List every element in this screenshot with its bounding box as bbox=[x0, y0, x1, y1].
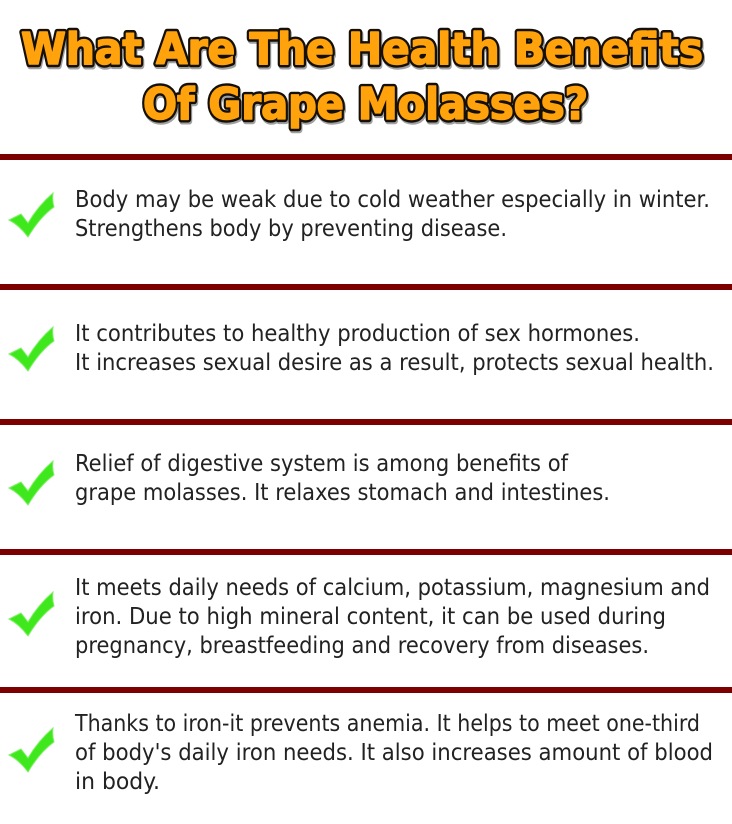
panel: benefit 4 bbox=[9, 575, 710, 659]
icon: check mark 3 bbox=[9, 461, 54, 505]
icon: check mark 1 bbox=[9, 193, 54, 237]
text: benefit 3 bbox=[75, 451, 610, 506]
title bbox=[21, 24, 704, 132]
icon: check mark 5 bbox=[9, 728, 54, 772]
text: benefit 1 bbox=[75, 187, 710, 242]
panel: benefit 3 bbox=[9, 451, 610, 506]
text: benefit 3: Relief of digestive system is among benefits of bbox=[75, 451, 569, 477]
icon: check mark 4 bbox=[9, 592, 54, 636]
title: Of Grape Molasses? bbox=[143, 79, 588, 130]
text: benefit 4: iron. Due to high mineral content, it can be used during bbox=[75, 604, 666, 630]
text: benefit 3: grape molasses. It relaxes stomach and intestines. bbox=[75, 480, 610, 506]
text: benefit 5 bbox=[74, 711, 713, 795]
text: benefit 2 bbox=[75, 321, 714, 376]
title: Of Grape Molasses? bbox=[144, 81, 589, 132]
panel: benefit 2 bbox=[9, 321, 714, 376]
text: benefit 2: It contributes to healthy production of sex hormones. bbox=[75, 321, 640, 347]
title: Of Grape Molasses? bbox=[143, 79, 588, 130]
panel: benefit 5 bbox=[9, 711, 713, 795]
text: benefit 1: Strengthens body by preventing disease. bbox=[75, 216, 507, 242]
icon: check mark 2 bbox=[9, 327, 54, 371]
text: benefit 5: in body. bbox=[75, 769, 160, 795]
text: benefit 4 bbox=[75, 575, 710, 659]
panel: benefit 1 bbox=[9, 187, 710, 242]
text: benefit 4: pregnancy, breastfeeding and recovery from diseases. bbox=[75, 633, 649, 659]
